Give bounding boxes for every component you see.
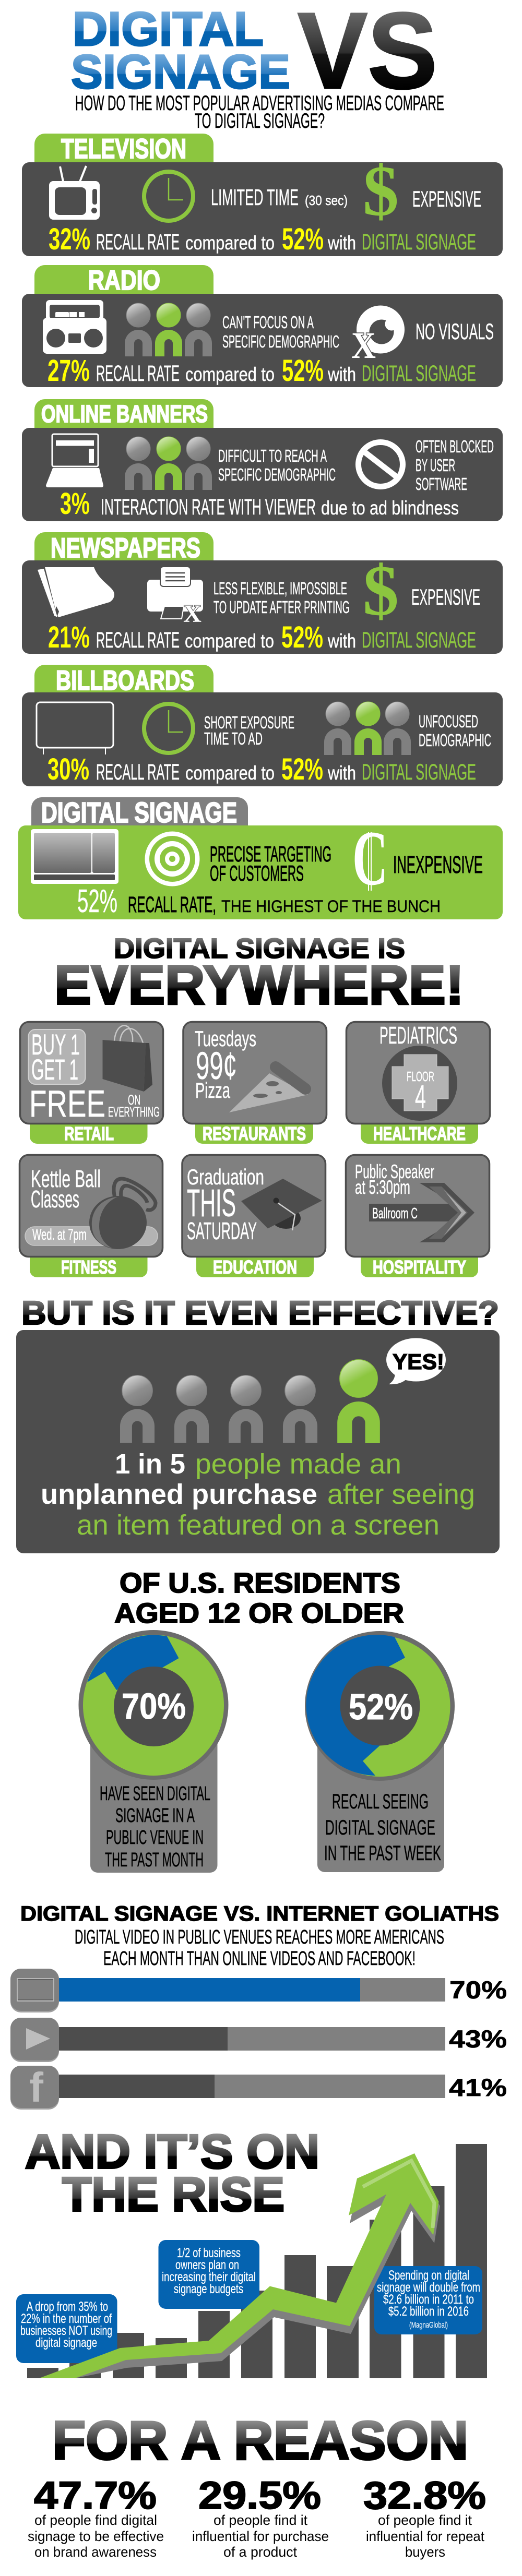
text: difficult to reach: SPECIFIC DEMOGRAPHIC [218,465,336,484]
label: hospitality: HOSPITALITY [373,1256,466,1278]
tab: newspapers [34,532,213,574]
buy one get one box [28,1028,86,1086]
panel: effectiveness [16,1330,500,1553]
recall rate row: compared to [185,762,275,784]
callout: drop in businesses: digital signage [35,2335,97,2350]
text: often blocked: SOFTWARE [416,474,467,494]
text: have seen digital signage: HAVE SEEN DIGITAL [100,1783,210,1805]
text: kettle ball classes: Classes [31,1185,79,1213]
callout: spending: signage will double from [377,2280,480,2295]
tab: newspapers: NEWSPAPERS [51,533,200,564]
tab: online banners [34,399,213,441]
callout: spending: $2.6 billion in 2011 to [383,2292,474,2307]
recall rate row: 52% [77,883,117,919]
text: unfocused demographic [419,712,491,750]
donut chart: 52%: 52% [349,1686,413,1727]
tab: radio: RADIO [88,265,160,296]
text: tuesdays 99 cent pizza: Tuesdays [195,1026,256,1051]
callout: business owners: signage budgets [174,2282,243,2296]
stat: 32.8%: 32.8% [363,2474,486,2517]
recall rate row: RECALL RATE [96,628,180,653]
recall rate row [48,620,476,654]
stat: 32.8%: buyers [405,2544,445,2560]
panel: newspapers [22,532,503,654]
text: difficult to reach: DIFFICULT TO REACH A [218,446,327,465]
icon: laptop [46,434,103,487]
icon: billboard [37,702,113,754]
heading: and it's on the rise: THE RISE [62,2168,284,2221]
text: graduation this saturday: THIS [187,1181,236,1225]
pill: wed at 7pm [25,1226,158,1245]
text: recall seeing digital signage [324,1790,441,1865]
label: fitness: FITNESS [61,1256,116,1278]
title: digital signage vs: DIGITAL [73,3,264,56]
text: precise targeting: OF CUSTOMERS [210,861,304,885]
callout: yes: YES! [393,1349,444,1374]
panel: billboards [22,665,503,786]
interaction rate row: due to ad blindness [321,497,459,519]
text: have seen digital signage [100,1783,210,1871]
text: often blocked [416,437,494,494]
icon: five people [120,1360,380,1443]
stat: 47.7% [28,2474,164,2560]
stat: 29.5%: influential for purchase [192,2529,329,2544]
icon: digital screen [31,829,118,884]
text: have seen digital signage: SIGNAGE IN A [115,1805,195,1827]
text: graduation this saturday: SATURDAY [187,1217,257,1244]
icon: people group [125,437,212,490]
icon: facebook [10,2064,59,2111]
tab: television: TELEVISION [61,134,186,164]
text: free on everything: FREE [29,1083,105,1125]
heading: digital signage vs internet goliaths: DIGITAL SIGNAGE VS. INTERNET GOLIATHS [20,1902,499,1925]
heading: of u.s. residents [114,1567,404,1629]
recall rate row: RECALL RATE, [128,892,216,917]
bar: online video 43% [10,2018,507,2062]
icon: floor cross: 4 [415,1079,426,1115]
title: digital signage vs [71,0,437,112]
subtitle [75,92,444,133]
bar: facebook 41% [10,2064,507,2111]
stat: 32.8%: of people find it [378,2512,472,2528]
icon: cent sign [352,815,388,902]
tab: television [34,134,213,175]
recall rate row: RECALL RATE [96,230,180,255]
icon: target [145,832,199,886]
text: less flexible [213,579,350,617]
text: tuesdays 99 cent pizza: 99¢ [196,1044,237,1087]
icon: clock [144,172,193,221]
icon: facebook: f [29,2064,43,2111]
recall rate row: 52% [281,620,323,654]
donut chart: 70%: 70% [122,1686,186,1727]
icon: television [49,166,100,220]
icon: direction arrow: Ballroom C [372,1205,418,1222]
text: public speaker [355,1161,434,1198]
callout: spending: Spending on digital [388,2268,469,2283]
stat: 32.8% [363,2474,486,2560]
callout: drop in businesses: A drop from 35% to [27,2299,108,2314]
title: digital signage vs: SIGNAGE [71,45,290,99]
interaction rate row: 3% [60,487,90,521]
heading: for a reason: FOR A REASON [52,2411,468,2471]
recall rate row [77,883,441,919]
heading: and it's on the rise [25,2125,319,2221]
text: kettle ball classes: Kettle Ball [31,1165,101,1192]
text: can't focus: CAN'T FOCUS ON A [222,313,314,332]
icon: kettlebell [89,1179,156,1249]
text: can't focus [222,313,339,351]
card: retail [20,1022,163,1144]
recall rate row: compared to [185,232,275,254]
card: education [182,1155,326,1278]
callout: drop in businesses [16,2294,117,2363]
callout: business owners [159,2240,259,2309]
label: education: EDUCATION [213,1256,297,1278]
recall rate row: 52% [281,752,323,786]
icon: blocked sign [358,442,403,486]
callout: spending [374,2266,482,2334]
stat: 47.7%: signage to be effective [28,2529,164,2544]
callout: drop in businesses: 22% in the number of [21,2311,112,2326]
text: have seen digital signage: PUBLIC VENUE IN [106,1827,204,1849]
recall rate row [48,752,476,786]
text: graduation this saturday [187,1165,264,1244]
recall rate row: 52% [282,354,324,388]
donut chart: 70% [78,1630,229,1780]
text: 1 in 5 people [41,1448,475,1541]
recall rate row: with [327,364,356,385]
stat: 29.5%: 29.5% [198,2474,321,2517]
icon: dollar sign: $ [363,151,399,231]
panel: television [22,134,503,256]
text: can't focus: SPECIFIC DEMOGRAPHIC [222,332,339,351]
text: tuesdays 99 cent pizza [195,1026,256,1103]
icon: floor cross: FLOOR [407,1069,434,1084]
icon: crossed out eye: X [351,325,376,366]
tab: digital signage: DIGITAL SIGNAGE [41,796,237,829]
text: pediatrics: PEDIATRICS [379,1022,457,1049]
text: graduation this saturday: Graduation [187,1165,264,1189]
icon: floor cross [382,1046,457,1121]
icon: graduation cap [241,1179,322,1230]
value: 43%: 43% [449,2025,507,2053]
icon: play button [10,2018,59,2062]
card: restaurants [183,1022,327,1144]
value: 70%: 70% [449,1976,507,2004]
text: less flexible: TO UPDATE AFTER PRINTING [213,597,350,617]
text: short exposure: SHORT EXPOSURE [204,713,294,732]
text: have seen digital signage: THE PAST MONTH [105,1849,204,1871]
pill: wed at 7pm: Wed. at 7pm [32,1226,87,1243]
recall rate row: with [327,232,356,254]
label: healthcare: HEALTHCARE [373,1123,466,1144]
label: restaurants: RESTAURANTS [203,1123,306,1144]
chart: rising bars [27,2144,487,2378]
recall rate row: 32% [49,222,90,256]
tab: billboards: BILLBOARDS [56,665,194,696]
heading: digital signage is everywhere: DIGITAL SIGNAGE IS [114,933,405,964]
callout: yes [386,1338,446,1384]
recall rate row: compared to [185,364,275,385]
text: public speaker: Public Speaker [355,1161,434,1182]
text: free on everything: EVERYTHING [108,1104,160,1120]
callout: spending: (MagnaGlobal) [409,2321,448,2330]
stat: 47.7%: of people find digital [34,2512,157,2528]
arrow: rising trend [39,2153,440,2378]
icon: tv screen [10,1969,59,2012]
text: precise targeting [210,842,331,885]
recall rate row: RECALL RATE [96,760,180,785]
text: recall seeing digital signage: IN THE PAST WEEK [324,1842,441,1865]
text: limited time: LIMITED TIME [211,185,299,210]
icon: people group [125,303,212,356]
bar: digital signage 70% [10,1969,507,2012]
icon: printer: X [183,600,201,628]
text: 1 in 5 people: unplanned purchase [41,1479,317,1510]
recall rate row: 52% [282,222,324,256]
recall rate row: compared to [185,630,274,652]
stat: 29.5%: of a product [223,2544,297,2560]
tab: billboards [34,665,213,706]
panel: digital signage [18,796,503,919]
buy one get one box: BUY 1 [31,1028,80,1061]
icon: shopping bag [102,1025,152,1092]
stat: 29.5% [192,2474,329,2560]
donut card: 70% [78,1630,229,1873]
text: short exposure [204,713,294,748]
label: retail: RETAIL [64,1123,114,1144]
card: fitness [20,1155,163,1278]
callout: business owners: 1/2 of business [177,2246,241,2260]
callout: business owners: increasing their digital [162,2270,256,2284]
heading: and it's on the rise: AND IT’S ON [25,2125,319,2178]
text: tuesdays 99 cent pizza: Pizza [195,1078,230,1103]
text: recall seeing digital signage: RECALL SEEING [332,1790,429,1813]
icon: printer [147,567,203,628]
icon: people group [324,702,411,755]
stat: 29.5%: of people find it [213,2512,307,2528]
icon: dollar sign: $ [363,550,399,630]
donut card: 52% [305,1631,455,1872]
icon: cent sign: C [352,815,388,902]
stat: 32.8%: influential for repeat [366,2529,484,2544]
tab: digital signage [31,796,248,839]
tab: online banners: ONLINE BANNERS [41,400,208,427]
recall rate row: 27% [48,354,90,388]
callout: spending: $5.2 billion in 2016 [388,2304,469,2319]
recall rate row: RECALL RATE [96,361,180,386]
icon: direction arrow [369,1183,474,1242]
card: hospitality [346,1155,490,1278]
recall rate row: THE HIGHEST OF THE BUNCH [221,897,441,916]
text: often blocked: BY USER [416,456,455,475]
recall rate row [49,222,476,256]
text: precise targeting: PRECISE TARGETING [210,842,331,866]
text: 1 in 5 people: an item featured on a screen [77,1509,440,1541]
text: 1 in 5 people: after seeing [327,1479,475,1510]
interaction rate row [60,487,459,521]
panel: online banners [22,399,503,521]
text: free on everything: ON [128,1092,140,1108]
value: 41%: 41% [449,2074,507,2101]
icon: crossed out eye [351,306,405,366]
text: 1 in 5 people: 1 in 5 [115,1448,185,1480]
recall rate row: with [327,762,356,784]
text: public speaker: at 5:30pm [355,1177,410,1198]
recall rate row: 30% [48,752,89,786]
icon: boombox [43,300,106,354]
icon: clock [144,704,193,753]
callout: business owners: owners plan on [175,2258,239,2272]
icon: pizza slice [229,1067,308,1112]
text: recall seeing digital signage: DIGITAL SIGNAGE [325,1816,435,1839]
card: healthcare [347,1022,490,1144]
text: kettle ball classes [31,1165,101,1213]
subtitle: TO DIGITAL SIGNAGE? [195,110,325,133]
stat: 47.7%: 47.7% [34,2474,157,2517]
heading: digital signage vs internet goliaths [20,1902,499,1970]
text: less flexible: LESS FLEXIBLE, IMPOSSIBLE [213,579,347,598]
heading: digital signage is everywhere: EVERYWHERE! [54,954,464,1016]
heading: of u.s. residents: OF U.S. RESIDENTS [120,1567,400,1599]
icon: newspaper [38,567,114,617]
heading: but is it even effective: BUT IS IT EVEN EFFECTIVE? [21,1294,499,1332]
recall rate row: with [327,630,356,652]
callout: drop in businesses: businesses NOT using [20,2323,112,2338]
heading: of u.s. residents: AGED 12 OR OLDER [114,1598,404,1629]
text: limited time: (30 sec) [305,193,348,208]
recall rate row: 21% [48,620,90,654]
recall rate row [48,354,476,388]
donut chart: 52% [305,1631,455,1781]
interaction rate row: INTERACTION RATE WITH VIEWER [101,495,316,520]
panel: radio [22,265,503,388]
tab: radio [34,265,213,307]
text: 1 in 5 people: people made an [195,1448,401,1480]
buy one get one box: GET 1 [31,1053,78,1086]
text: difficult to reach [218,446,336,484]
stat: 47.7%: on brand awareness [34,2544,157,2560]
text: short exposure: TIME TO AD [204,729,263,748]
